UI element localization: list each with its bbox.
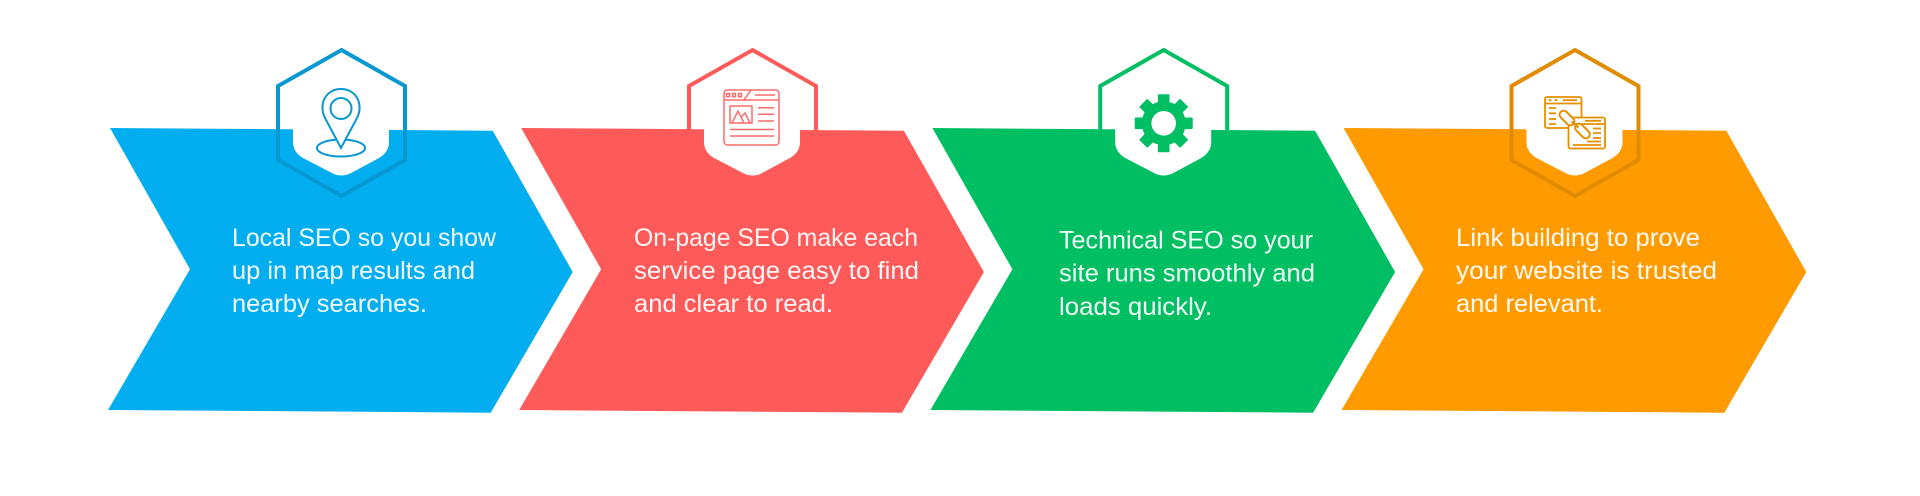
panel: link building — [1342, 50, 1806, 413]
text: local SEO description: nearby searches. — [232, 290, 427, 318]
hexagon badge: blue — [278, 50, 405, 196]
text: technical SEO description: Technical SEO so your — [1059, 226, 1313, 254]
hexagon badge: green — [1100, 50, 1227, 176]
arrow: orange — [1342, 128, 1806, 413]
text: local SEO description: Local SEO so you show — [232, 224, 497, 252]
arrow: red — [519, 128, 984, 413]
text: on-page SEO description: On-page SEO make each — [634, 224, 918, 252]
text: technical SEO description: site runs smoothly and — [1059, 260, 1315, 288]
hexagon badge: orange — [1512, 50, 1638, 196]
panel: local SEO — [108, 50, 573, 413]
icon: linked pages — [1545, 97, 1605, 148]
icon: map pin — [317, 89, 365, 156]
icon: web page layout — [724, 90, 779, 145]
text: local SEO description: up in map results and — [232, 257, 475, 285]
text: link building description: Link building to prove — [1456, 224, 1700, 252]
panel: technical SEO — [930, 50, 1395, 413]
text: on-page SEO description: and clear to read. — [634, 290, 833, 318]
text: on-page SEO description: service page easy to find — [634, 257, 919, 285]
text: link building description: your website is trusted — [1456, 257, 1717, 285]
arrow: blue — [108, 128, 573, 413]
text: link building description: and relevant. — [1456, 290, 1603, 318]
icon: gear — [1135, 94, 1193, 152]
hexagon badge: red — [689, 50, 816, 176]
arrow: green — [930, 128, 1395, 413]
panel: on-page SEO — [519, 50, 984, 413]
text: technical SEO description: loads quickly. — [1059, 293, 1212, 321]
